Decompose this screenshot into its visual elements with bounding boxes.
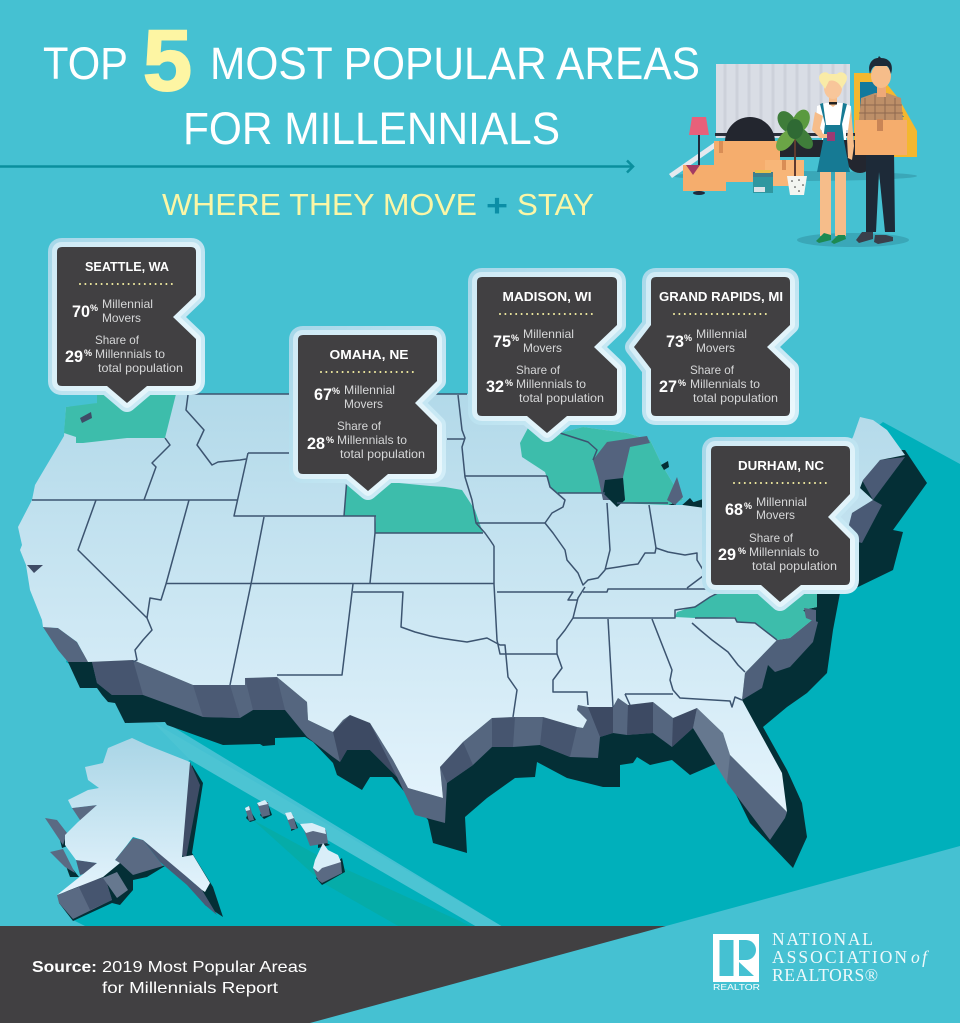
state: wisconsin and michigan (520, 427, 683, 505)
callout: seattle: Millennials to (95, 347, 165, 361)
map surface (18, 394, 905, 812)
realtor logo: REALTOR (713, 982, 760, 992)
callout: omaha: Share of (337, 419, 382, 433)
callout: seattle: Millennial (102, 297, 153, 311)
callout: durham: DURHAM, NC (738, 459, 824, 473)
callout: seattle: total population (98, 361, 183, 375)
callout: durham: Millennial (756, 495, 807, 509)
callout: grand rapids: % (678, 378, 686, 388)
subtitle: + (486, 188, 508, 223)
callout: omaha: Millennial (344, 383, 395, 397)
long shadow background (66, 422, 960, 927)
source note: for Millennials Report (102, 980, 279, 997)
title: 5 (143, 13, 192, 109)
woman (812, 72, 854, 244)
callout: omaha: % (326, 435, 334, 445)
source note: 2019 Most Popular Areas (102, 959, 307, 976)
callout: seattle: 29 (65, 347, 83, 366)
title (43, 13, 700, 154)
outer banks (804, 608, 816, 622)
callout: seattle: % (90, 303, 98, 313)
callout: omaha: total population (340, 447, 425, 461)
highlighted states (64, 394, 817, 640)
callout: omaha: Millennials to (337, 433, 407, 447)
map walls (43, 457, 905, 840)
callout: madison: 75 (493, 332, 511, 351)
subtitle: WHERE THEY MOVE (162, 187, 477, 222)
subtitle: STAY (517, 187, 594, 222)
callout: madison: 32 (486, 377, 504, 396)
arrow divider (0, 160, 633, 172)
callout: durham: Share of (749, 531, 794, 545)
callout: grand rapids: % (684, 333, 692, 343)
truck (669, 64, 917, 178)
callout: grand rapids: GRAND RAPIDS, MI (659, 290, 783, 304)
man (855, 56, 907, 244)
callout: grand rapids (634, 277, 790, 416)
callout: madison: Millennials to (516, 377, 586, 391)
source note: Source: (32, 959, 97, 976)
callout: durham: Millennials to (749, 545, 819, 559)
alaska walls (45, 762, 217, 919)
callout: madison: % (505, 378, 513, 388)
michigan shadow (660, 498, 700, 512)
title: MOST POPULAR AREAS (210, 38, 700, 89)
realtor logo (713, 929, 929, 992)
illustration: couple moving (669, 56, 917, 247)
subtitle (162, 187, 594, 223)
callout: seattle: 70 (72, 302, 90, 321)
alaska shadow (56, 765, 223, 921)
title: FOR MILLENNIALS (183, 103, 560, 154)
ground shadows (673, 171, 917, 247)
callout: durham: % (738, 546, 746, 556)
callout: durham: Movers (756, 508, 795, 522)
map drop shadow (68, 450, 927, 868)
alaska surface (57, 738, 210, 895)
callout: grand rapids: Millennial (696, 327, 747, 341)
association name (772, 929, 929, 985)
callout: madison: Movers (523, 341, 562, 355)
puget sound (80, 412, 92, 423)
association name: REALTORS® (772, 965, 878, 985)
callout: madison: MADISON, WI (502, 290, 592, 304)
boxes (683, 141, 804, 193)
us map (18, 394, 927, 868)
footer band (0, 926, 666, 1023)
callout: grand rapids: 73 (666, 332, 684, 351)
san francisco bay (27, 565, 43, 573)
east coast wall (742, 620, 818, 700)
state: washington (64, 394, 176, 443)
callout: madison: total population (519, 391, 604, 405)
callout: seattle: Share of (95, 333, 140, 347)
association name: NATIONAL (772, 929, 873, 949)
callout: seattle: % (84, 348, 92, 358)
callout: grand rapids: 27 (659, 377, 677, 396)
title: TOP (43, 38, 128, 89)
callout: madison: Share of (516, 363, 561, 377)
callout: omaha: OMAHA, NE (330, 348, 408, 362)
callout: grand rapids: total population (693, 391, 778, 405)
callout: seattle (57, 247, 196, 403)
callout: omaha: 28 (307, 434, 325, 453)
new england walls (845, 500, 882, 543)
callout: madison (477, 277, 617, 433)
lamp (689, 117, 709, 195)
callout: seattle: SEATTLE, WA (85, 260, 169, 274)
callout: durham: total population (752, 559, 837, 573)
callout: durham: % (744, 501, 752, 511)
association name: of (911, 947, 929, 967)
state: north carolina (675, 590, 817, 640)
callout: grand rapids: Movers (696, 341, 735, 355)
callout: grand rapids: Millennials to (690, 377, 760, 391)
lake michigan walls (27, 412, 816, 622)
callout: seattle: Movers (102, 311, 141, 325)
logo mark (713, 934, 759, 982)
callout: omaha: Movers (344, 397, 383, 411)
potted plant (772, 107, 817, 195)
callout: madison: Millennial (523, 327, 574, 341)
source note (32, 959, 307, 997)
callout: omaha: % (332, 386, 340, 396)
callout: grand rapids: Share of (690, 363, 735, 377)
callout: durham: 68 (725, 500, 743, 519)
callout: madison: % (511, 333, 519, 343)
callout: durham (711, 446, 850, 602)
state borders (32, 394, 777, 717)
hawaii islands (245, 800, 345, 885)
state: nebraska (344, 478, 483, 533)
callout: omaha (298, 335, 437, 491)
alaska (45, 738, 223, 921)
callout: durham: 29 (718, 545, 736, 564)
association name: ASSOCIATION (772, 947, 907, 967)
callout: omaha: 67 (314, 385, 332, 404)
